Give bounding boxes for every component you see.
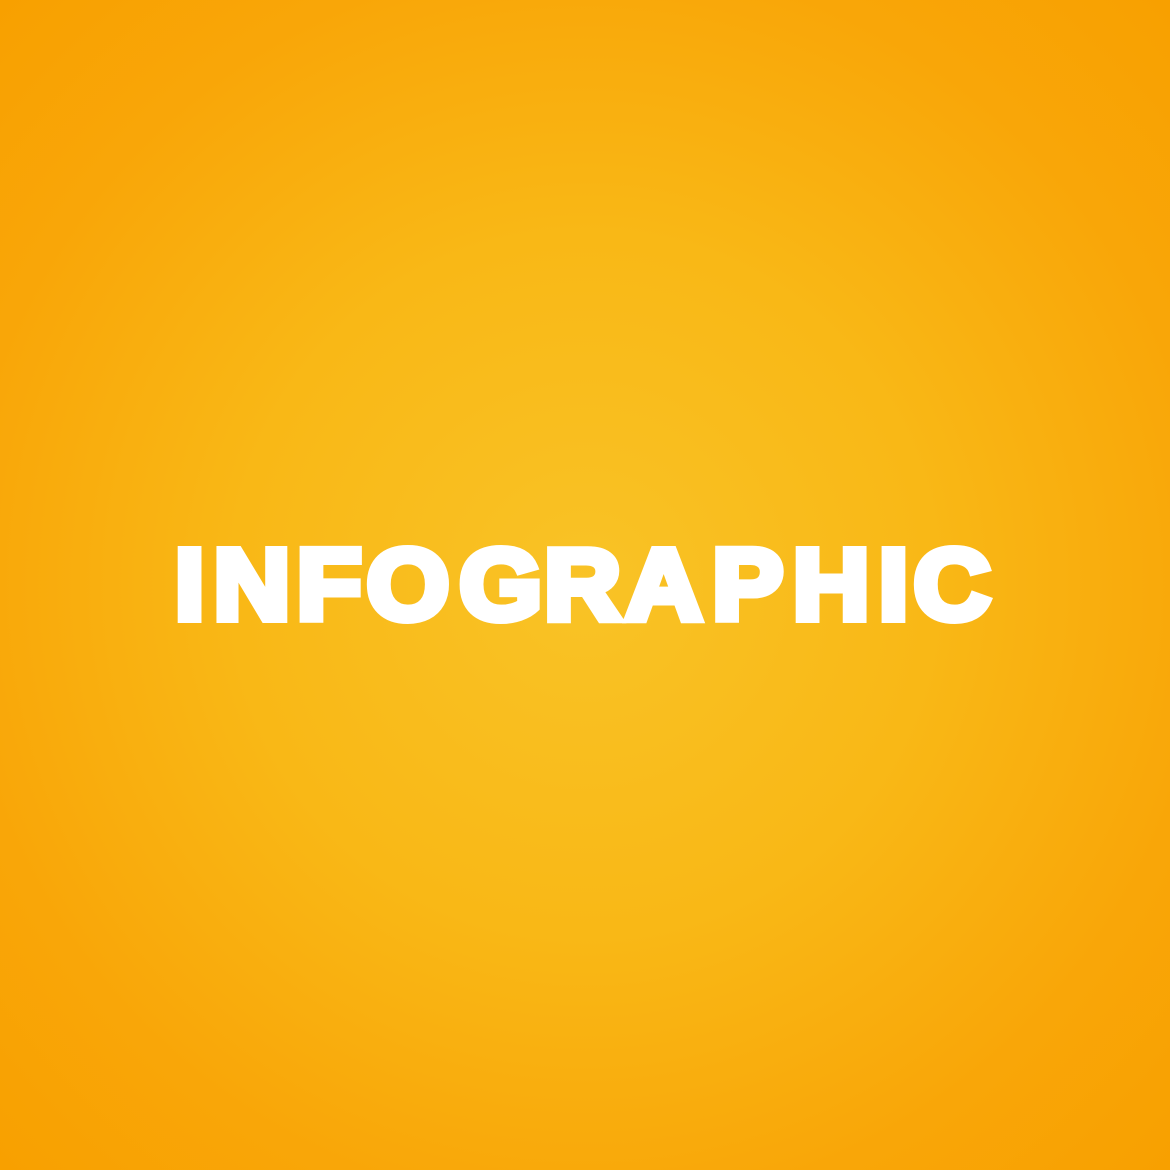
title: INFOGRAPHIC: INFOGRAPHIC bbox=[175, 529, 990, 640]
